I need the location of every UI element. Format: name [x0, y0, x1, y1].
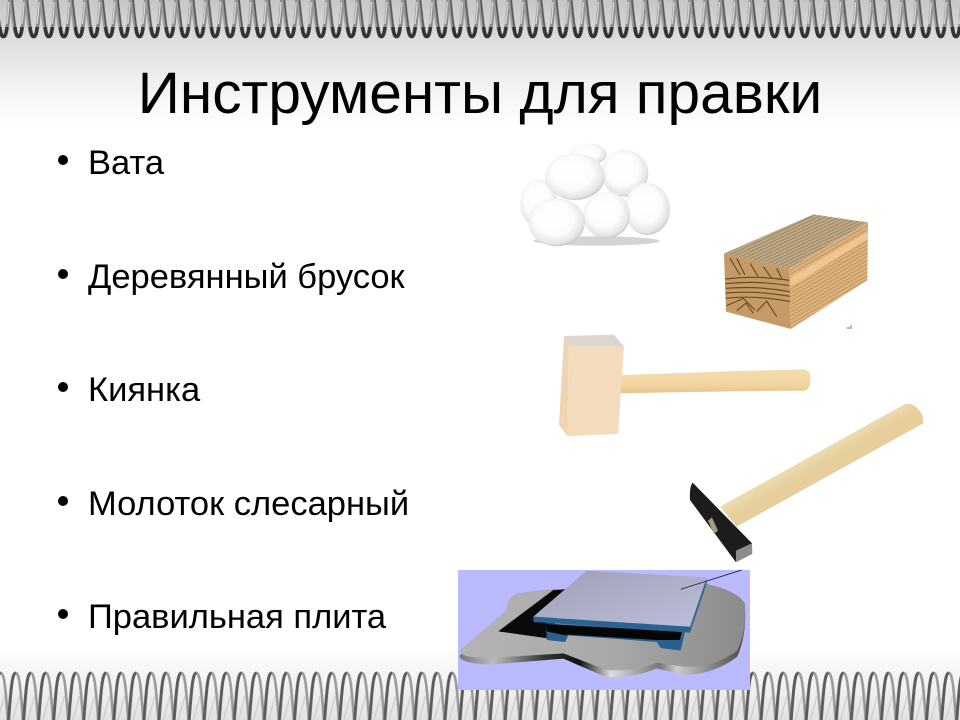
text: Молоток слесарный — [88, 485, 409, 523]
top background band — [0, 0, 960, 125]
list item: locksmith hammer — [58, 485, 409, 523]
title: Инструменты для правки — [138, 61, 822, 126]
bottom background band — [0, 645, 960, 720]
image: straightening plate — [458, 570, 750, 690]
text: Киянка — [88, 371, 200, 409]
list item: mallet — [58, 371, 200, 409]
text: Деревянный брусок — [88, 258, 405, 296]
surface plate base — [459, 584, 745, 677]
plate slab — [533, 571, 707, 633]
list item: straightening plate — [58, 598, 386, 636]
text: Правильная плита — [88, 598, 386, 636]
image: cotton balls — [520, 144, 670, 246]
image: locksmith hammer — [690, 404, 923, 562]
text: Вата — [88, 144, 164, 182]
image: wooden block — [724, 214, 868, 329]
top spring binding — [0, 0, 960, 44]
image: wooden mallet — [559, 335, 811, 436]
plate support — [546, 623, 685, 651]
workpiece wire — [681, 570, 742, 589]
bottom spring binding — [0, 668, 960, 720]
list item: wooden block — [58, 258, 405, 296]
bullet list — [58, 144, 409, 636]
list item: cotton — [58, 144, 164, 182]
